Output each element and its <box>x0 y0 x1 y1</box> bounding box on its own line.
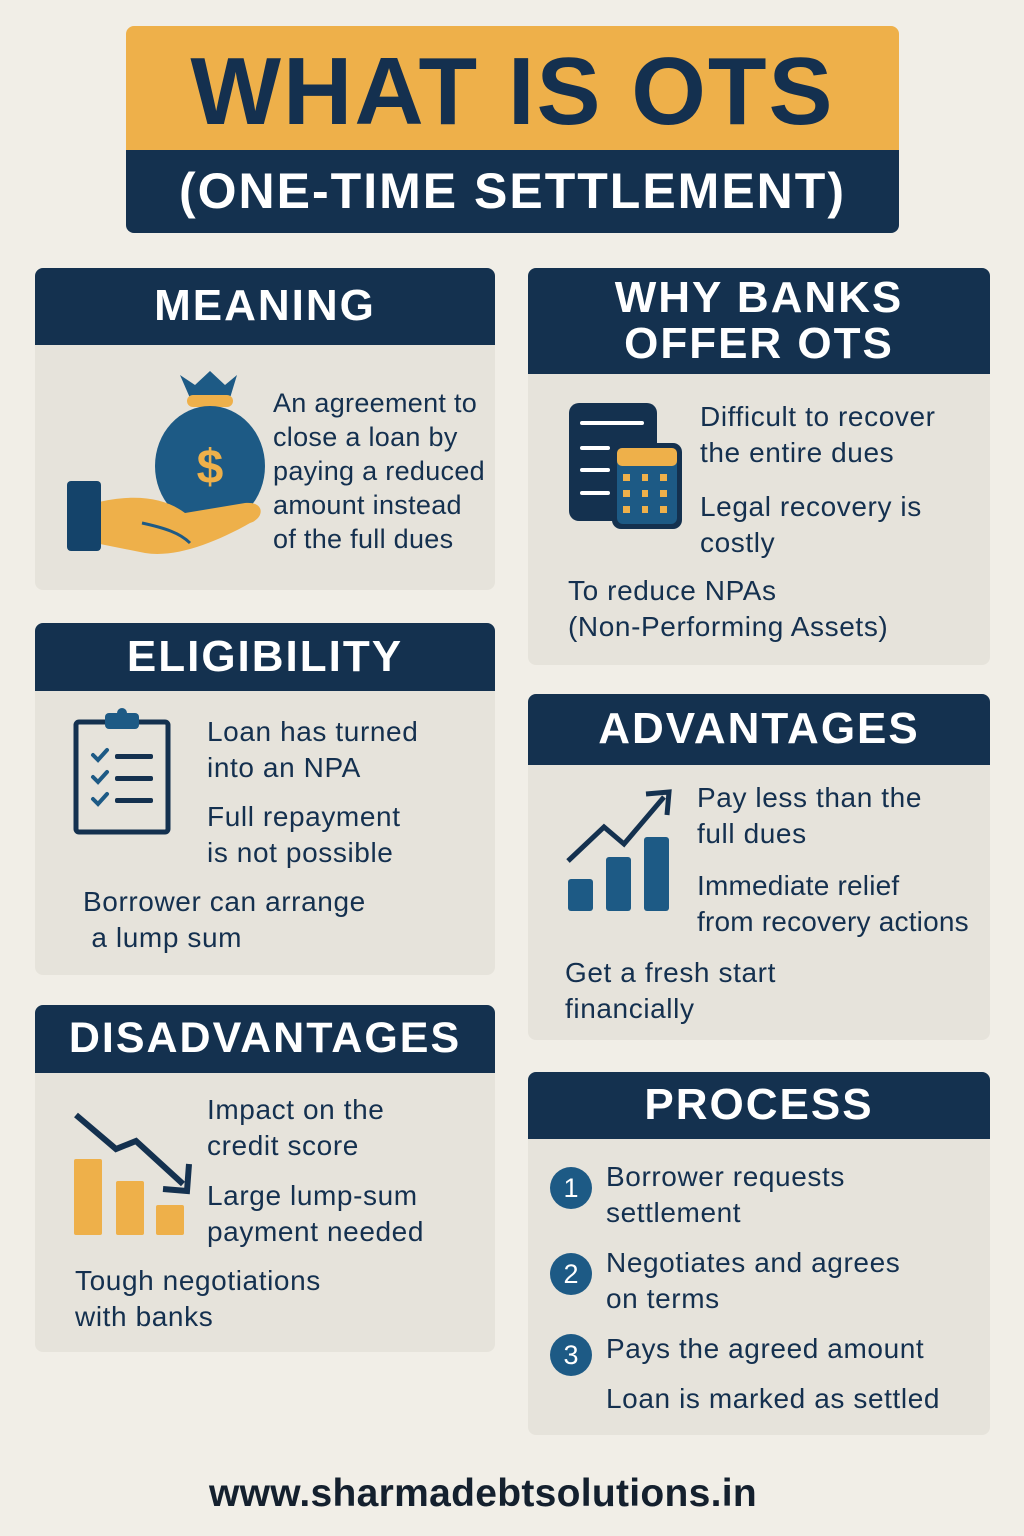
text: fresh start <box>565 957 776 1024</box>
heading: why banks <box>528 268 990 374</box>
text: pay less: full dues <box>697 818 807 849</box>
icon: money bag in hand: $ <box>197 441 224 494</box>
heading: meaning: MEANING <box>154 281 376 330</box>
text: relief <box>697 870 969 937</box>
text: meaning: amount instead <box>273 490 462 520</box>
panel: advantages <box>528 694 990 1040</box>
text: full repayment: is not possible <box>207 837 393 868</box>
text: pay less: Pay less than the <box>697 782 922 813</box>
heading: why banks: OFFER OTS <box>624 319 894 368</box>
heading: meaning <box>35 268 495 345</box>
number badge 2 <box>550 1253 592 1295</box>
text: lump sum payment: payment needed <box>207 1216 424 1247</box>
icon: falling chart <box>74 1112 192 1235</box>
text: credit score: Impact on the <box>207 1094 384 1125</box>
text: tough negotiations: Tough negotiations <box>75 1265 321 1296</box>
step 3: Pays the agreed amount <box>606 1333 924 1364</box>
number badge 1 <box>550 1167 592 1209</box>
text: credit score <box>207 1094 384 1161</box>
text: meaning <box>273 388 485 554</box>
text: why reasons: Difficult to recover <box>700 401 936 432</box>
number badge 3: 3 <box>563 1340 579 1370</box>
text: meaning: An agreement to <box>273 388 477 418</box>
step 1: settlement <box>606 1197 741 1228</box>
text: eligibility items <box>207 716 418 783</box>
subtitle <box>126 150 899 233</box>
icon: checklist clipboard <box>74 708 170 834</box>
heading: disadvantages <box>35 1005 495 1073</box>
text: lump sum payment: Large lump-sum <box>207 1180 418 1211</box>
text: relief: from recovery actions <box>697 906 969 937</box>
number badge 3 <box>550 1334 592 1376</box>
subtitle: (ONE-TIME SETTLEMENT) <box>179 163 846 219</box>
icon: document and calculator <box>569 403 682 529</box>
panel: meaning <box>35 268 495 590</box>
panel: eligibility <box>35 623 495 975</box>
text: meaning: paying a reduced <box>273 456 485 486</box>
text: fresh start: financially <box>565 993 695 1024</box>
text: relief: Immediate relief <box>697 870 899 901</box>
text: lump sum payment <box>207 1180 424 1247</box>
heading: advantages <box>528 694 990 765</box>
heading: process: PROCESS <box>644 1080 874 1129</box>
text: NPA: (Non-Performing Assets) <box>568 611 888 642</box>
text: tough negotiations <box>75 1265 321 1332</box>
step 3: Loan is marked as settled <box>606 1383 940 1414</box>
panel: disadvantages <box>35 1005 495 1352</box>
step 2: on terms <box>606 1283 720 1314</box>
text: lump sum <box>83 886 366 953</box>
number badge 2: 2 <box>563 1259 579 1289</box>
heading: process <box>528 1072 990 1139</box>
title main: WHAT IS OTS <box>190 38 835 145</box>
text: lump sum: Borrower can arrange <box>83 886 366 917</box>
panel: why banks offer OTS <box>528 268 990 665</box>
text: tough negotiations: with banks <box>75 1301 213 1332</box>
step 2 <box>550 1247 900 1314</box>
step 2: Negotiates and agrees <box>606 1247 900 1278</box>
icon: rising chart <box>566 789 672 911</box>
text: pay less <box>697 782 922 849</box>
heading: why banks: WHY BANKS <box>615 273 903 322</box>
number badge 1: 1 <box>563 1173 579 1203</box>
text: meaning: of the full dues <box>273 524 453 554</box>
text: NPA <box>568 575 888 642</box>
text: credit score: credit score <box>207 1130 359 1161</box>
step 3 <box>550 1333 940 1414</box>
text: eligibility items: into an NPA <box>207 752 361 783</box>
step 1 <box>550 1161 845 1228</box>
text: eligibility items: Loan has turned <box>207 716 418 747</box>
footer url: www.sharmadebtsolutions.in <box>209 1472 757 1515</box>
heading: advantages: ADVANTAGES <box>598 704 920 753</box>
text: legal: costly <box>700 527 775 558</box>
panel: process <box>528 1072 990 1435</box>
text: full repayment: Full repayment <box>207 801 401 832</box>
heading: disadvantages: DISADVANTAGES <box>69 1014 461 1062</box>
text: legal <box>700 491 922 558</box>
text: why reasons <box>700 401 936 468</box>
icon: money bag in hand <box>67 371 265 554</box>
text: legal: Legal recovery is <box>700 491 922 522</box>
text: fresh start: Get a fresh start <box>565 957 776 988</box>
heading: eligibility: ELIGIBILITY <box>127 632 403 681</box>
title <box>126 26 899 233</box>
text: lump sum: a lump sum <box>91 922 242 953</box>
text: meaning: close a loan by <box>273 422 458 452</box>
text: full repayment <box>207 801 401 868</box>
heading: eligibility <box>35 623 495 691</box>
step 1: Borrower requests <box>606 1161 845 1192</box>
text: NPA: To reduce NPAs <box>568 575 777 606</box>
text: why reasons: the entire dues <box>700 437 894 468</box>
